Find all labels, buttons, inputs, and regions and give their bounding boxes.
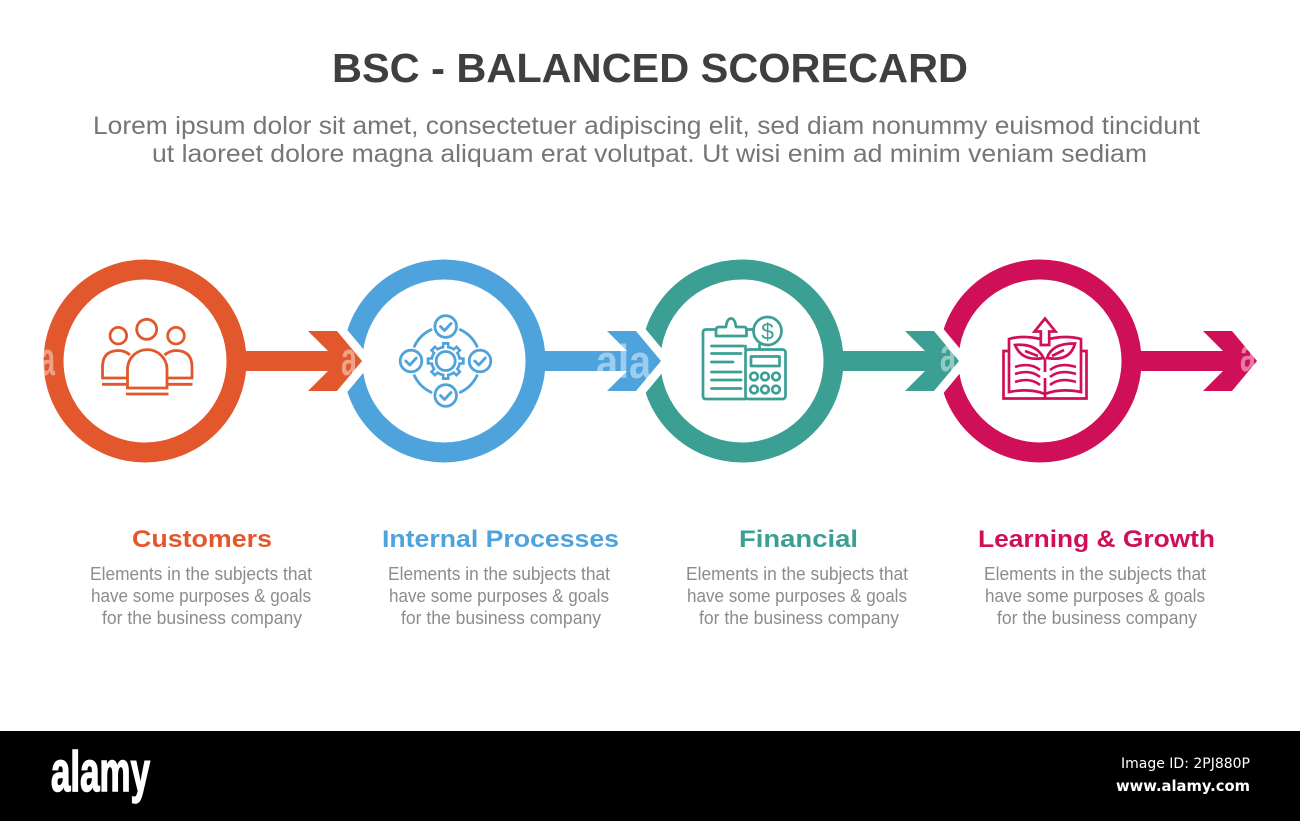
description: customers: for the business company [102,608,302,628]
footer website: www.alamy.com [1116,777,1250,795]
description: customers [90,564,312,628]
description: financial: have some purposes & goals [687,586,907,606]
text block: financial [686,526,908,628]
watermark marks over arrow tips: a [940,328,957,381]
description: internal processes: Elements in the subjects that [388,564,610,584]
description: financial [686,564,908,628]
step 3: financial ring, arrow and icon [650,270,970,452]
gap cut into next ring [936,320,970,402]
arrow: internal processes [545,331,661,391]
watermark marks over arrow tips: ala [596,335,652,388]
footer logo: alamy [51,740,150,804]
ring: financial [650,270,834,452]
watermark marks over arrow tips: a [341,332,358,385]
arrow: financial [843,331,959,391]
description: internal processes: for the business company [401,608,601,628]
text block: customers [90,526,312,628]
step 1: customers ring, arrow and icon [54,270,373,452]
description: internal processes: have some purposes & goals [389,586,609,606]
heading: customers: Customers [132,526,272,553]
gap cut into next ring [339,320,373,402]
icon: dollar sign: $ [761,318,774,344]
heading: financial: Financial [739,526,858,553]
footer bar [0,731,1300,821]
ring: internal processes [352,270,536,452]
description: internal processes [388,564,610,628]
intro paragraph: Lorem ipsum dolor sit amet, consectetuer adipiscing elit, sed diam nonummy euismod tincidunt [93,112,1200,140]
description: learning and growth [984,564,1206,628]
intro paragraph: ut laoreet dolore magna aliquam erat volutpat. Ut wisi enim ad minim veniam sediam [152,140,1147,168]
intro paragraph [93,112,1200,168]
icon: open book with plant and up arrow [1004,318,1086,398]
arrow: customers [246,331,362,391]
gap cut into next ring [638,320,672,402]
icon: clipboard, coin and calculator [703,317,786,399]
step 4: learning and growth ring, arrow and icon [948,270,1257,452]
icon: group of people [102,319,192,394]
description: financial: for the business company [699,608,899,628]
ring: customers [54,270,236,452]
description: customers: have some purposes & goals [91,586,311,606]
description: customers: Elements in the subjects that [90,564,312,584]
watermark marks over arrow tips: a [1240,328,1257,381]
description: learning and growth: for the business company [997,608,1197,628]
watermark marks over arrow tips [40,328,1257,388]
step 2: internal processes ring, arrow and icon [352,270,672,452]
description: financial: Elements in the subjects that [686,564,908,584]
title: BSC - BALANCED SCORECARD [332,45,968,91]
heading: internal processes: Internal Processes [382,526,619,553]
description: learning and growth: have some purposes & goals [985,586,1205,606]
text block: learning and growth [978,526,1215,628]
ring: learning and growth [948,270,1132,452]
text block: internal processes [382,526,619,628]
heading: learning and growth: Learning & Growth [978,526,1215,553]
description: learning and growth: Elements in the subjects that [984,564,1206,584]
arrow: learning and growth [1141,331,1257,391]
watermark marks over arrow tips: a [40,332,55,385]
icon: gear with four check marks [400,316,491,406]
footer image id: Image ID: 2PJ880P [1121,756,1250,772]
